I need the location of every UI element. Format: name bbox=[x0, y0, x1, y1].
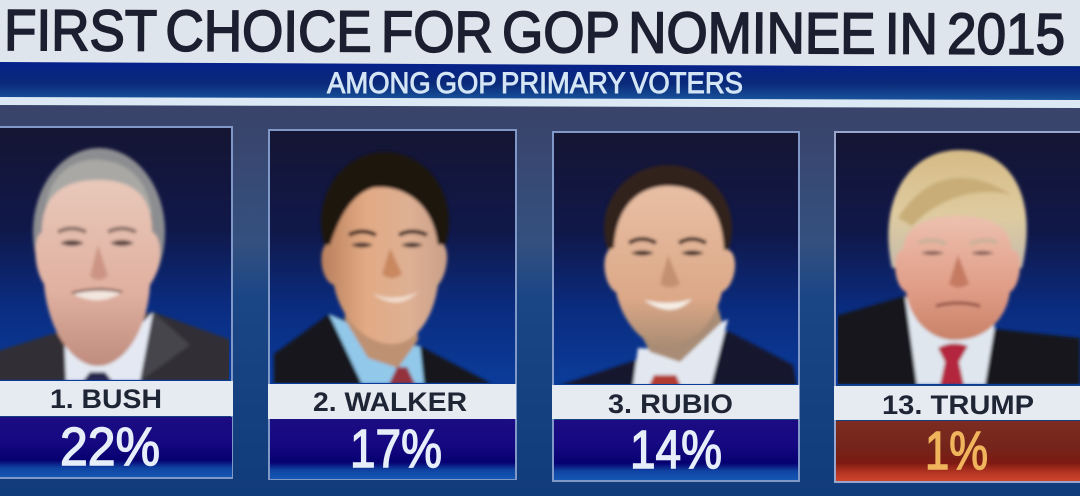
name label bbox=[834, 386, 1080, 420]
panel: Walker bbox=[268, 130, 516, 479]
percentage: 17% bbox=[350, 419, 442, 479]
portrait: Trump bbox=[836, 150, 1080, 385]
name label bbox=[552, 385, 799, 419]
panel: Trump bbox=[834, 132, 1080, 482]
name label: 1. BUSH bbox=[50, 384, 162, 414]
portrait: Bush bbox=[0, 148, 231, 381]
portrait: Rubio bbox=[557, 165, 797, 386]
subtitle band bbox=[0, 62, 1080, 108]
studio background bbox=[0, 100, 1080, 496]
name label: 3. RUBIO bbox=[608, 389, 733, 419]
subtitle: AMONG GOP PRIMARY VOTERS bbox=[327, 67, 743, 100]
portrait: Walker bbox=[274, 152, 492, 384]
percentage: 22% bbox=[60, 417, 160, 477]
percentage: 14% bbox=[630, 420, 722, 480]
percentage bbox=[0, 417, 232, 477]
title bar bbox=[0, 0, 1080, 67]
name label: 13. TRUMP bbox=[882, 390, 1034, 420]
name label bbox=[0, 381, 233, 416]
percentage bbox=[836, 421, 1080, 481]
name label bbox=[268, 384, 516, 419]
percentage bbox=[270, 419, 515, 479]
percentage bbox=[554, 420, 798, 480]
panel: Rubio bbox=[552, 132, 799, 481]
panel: Bush bbox=[0, 127, 233, 478]
percentage: 1% bbox=[925, 421, 988, 481]
name label: 2. WALKER bbox=[313, 387, 467, 417]
